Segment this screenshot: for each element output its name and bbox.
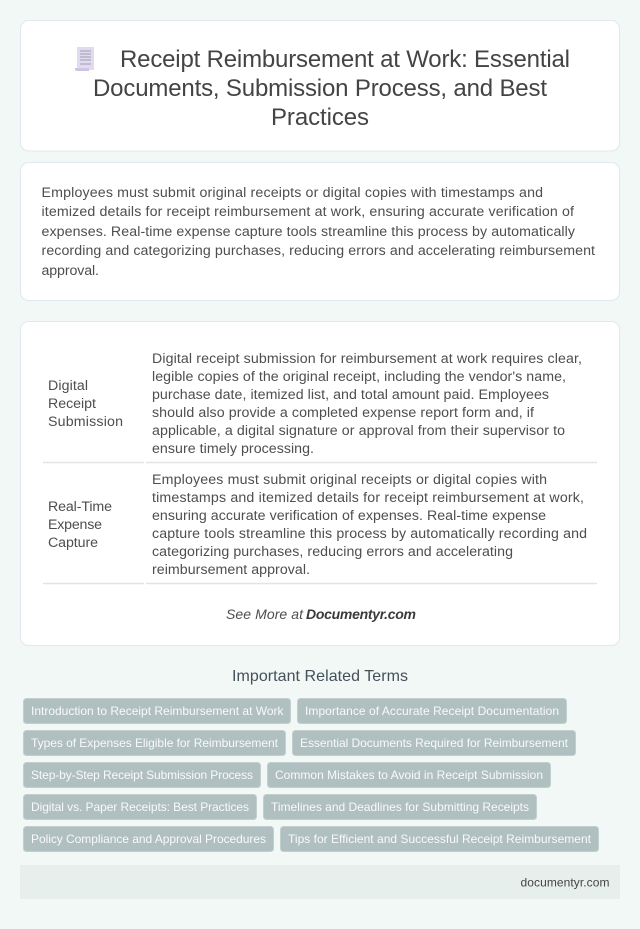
- chip: [24, 826, 274, 852]
- see more link: See More at: [226, 606, 304, 622]
- row description: reimbursement approval.: [152, 562, 310, 578]
- intro paragraph: recording and categorizing purchases, reducing errors and accelerating reimbursement: [42, 243, 595, 259]
- row: Digital Receipt Submission: [48, 351, 582, 457]
- intro paragraph: Employees must submit original receipts or digital copies with timestamps and: [42, 185, 543, 201]
- row label: Capture: [48, 535, 98, 551]
- chip: [280, 826, 598, 852]
- chip: [268, 762, 550, 788]
- row label: Submission: [48, 414, 123, 430]
- icon: receipt: [75, 47, 94, 71]
- row description: Digital receipt submission for reimbursement at work requires clear,: [152, 351, 582, 367]
- row description: [152, 472, 587, 578]
- panel: title: [20, 20, 620, 151]
- chip: [264, 794, 536, 820]
- title text: Practices: [271, 104, 369, 131]
- row description: applicable, a digital signature or approval from their supervisor to: [152, 423, 565, 439]
- chip: Policy Compliance and Approval Procedures: [31, 832, 266, 846]
- row description: purchase date, itemized list, and total amount paid. Employees: [152, 387, 549, 403]
- row description: Employees must submit original receipts or digital copies with: [152, 472, 547, 488]
- intro paragraph: itemized details for receipt reimbursement at work, ensuring accurate verification of: [42, 204, 574, 220]
- row description: ensuring accurate verification of expenses. Real-time expense: [152, 508, 546, 524]
- chip: Types of Expenses Eligible for Reimbursement: [31, 736, 279, 750]
- title text: [93, 46, 570, 131]
- see more link: [226, 606, 416, 622]
- row description: ensure timely processing.: [152, 441, 314, 457]
- related terms chips: [24, 698, 598, 852]
- footer: documentyr.com: [520, 876, 610, 890]
- title text: Documents, Submission Process, and Best: [93, 75, 547, 102]
- row description: categorizing purchases, reducing errors and accelerating: [152, 544, 513, 560]
- chip: [24, 698, 290, 724]
- row label: Real-Time: [48, 499, 112, 515]
- row description: should also provide a completed expense report form and, if: [152, 405, 534, 421]
- row description: [152, 351, 582, 457]
- chip: [298, 698, 566, 724]
- panel: details table: [20, 322, 620, 646]
- chip: [24, 794, 256, 820]
- chip: [24, 730, 286, 756]
- row: Real-Time Expense Capture: [48, 472, 587, 578]
- row description: timestamps and itemized details for receipt reimbursement at work,: [152, 490, 584, 506]
- row label: Receipt: [48, 396, 96, 412]
- row label: Digital: [48, 378, 88, 394]
- chip: Common Mistakes to Avoid in Receipt Submission: [275, 768, 543, 782]
- chip: [292, 730, 576, 756]
- row description: legible copies of the original receipt, including the vendor's name,: [152, 369, 566, 385]
- row label: [48, 499, 112, 551]
- chip: Tips for Efficient and Successful Receipt Reimbursement: [288, 832, 592, 846]
- row label: Expense: [48, 517, 102, 533]
- intro paragraph: expenses. Real-time expense capture tools streamline this process by automatically: [42, 224, 576, 240]
- chip: Digital vs. Paper Receipts: Best Practices: [31, 800, 249, 814]
- chip: Timelines and Deadlines for Submitting Receipts: [271, 800, 529, 814]
- row description: capture tools streamline this process by automatically recording and: [152, 526, 587, 542]
- row label: [48, 378, 123, 430]
- chip: Introduction to Receipt Reimbursement at Work: [31, 704, 284, 718]
- footer: [20, 865, 620, 899]
- chip: [24, 762, 260, 788]
- intro paragraph: [42, 185, 595, 279]
- panel: introduction: [20, 162, 620, 300]
- chip: Essential Documents Required for Reimbursement: [300, 736, 569, 750]
- chip: Importance of Accurate Receipt Documentation: [305, 704, 559, 718]
- heading: Important Related Terms: Important Related Terms: [232, 668, 408, 685]
- intro paragraph: approval.: [42, 263, 99, 279]
- title text: Receipt Reimbursement at Work: Essential: [120, 46, 570, 73]
- chip: Step-by-Step Receipt Submission Process: [31, 768, 253, 782]
- see more link: Documentyr.com: [306, 606, 416, 622]
